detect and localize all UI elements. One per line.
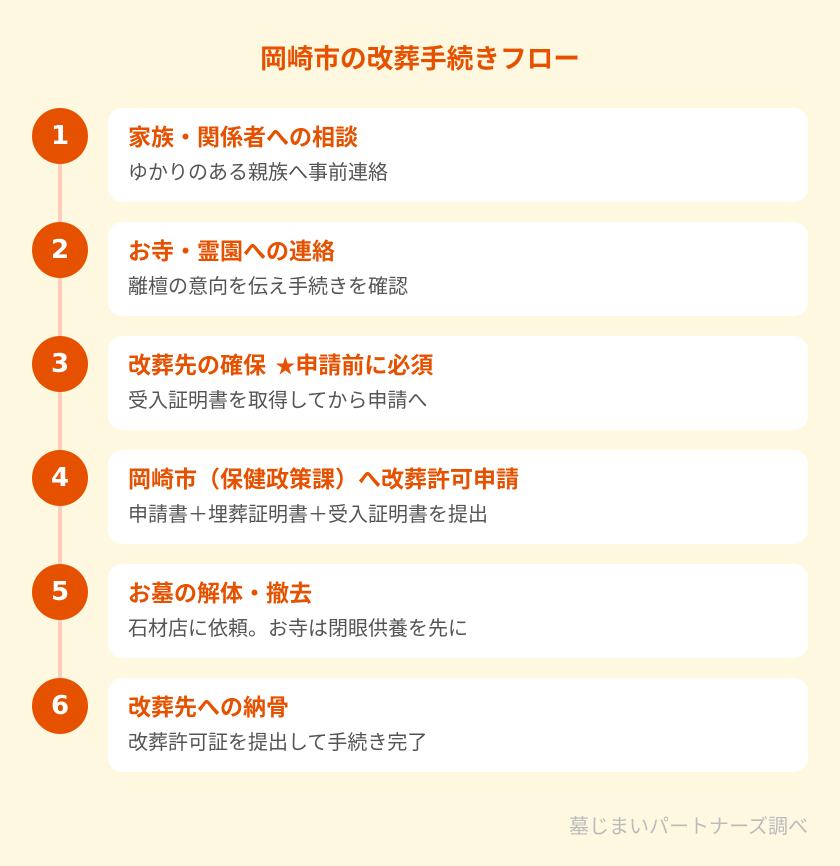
panel: step 5 bbox=[108, 564, 808, 658]
step 5 description: 石材店に依頼。お寺は閉眼供養を先に bbox=[128, 618, 468, 640]
step 5 heading: お墓の解体・撤去 bbox=[128, 580, 312, 606]
panel: step 2 bbox=[108, 222, 808, 316]
step 5 number bbox=[32, 564, 88, 620]
step 2 description: 離檀の意向を伝え手続きを確認 bbox=[128, 276, 408, 298]
step 2 heading: お寺・霊園への連絡 bbox=[128, 238, 335, 264]
step 6 number: 6 bbox=[51, 691, 69, 721]
step 2 number bbox=[32, 222, 88, 278]
step 3 number bbox=[32, 336, 88, 392]
step 4 heading: 岡崎市（保健政策課）へ改葬許可申請 bbox=[128, 466, 519, 492]
panel: step 6 bbox=[108, 678, 808, 772]
panel: step 4 bbox=[108, 450, 808, 544]
step 4 number: 4 bbox=[51, 463, 69, 493]
panel: step 3 bbox=[108, 336, 808, 430]
source note: 墓じまいパートナーズ調べ bbox=[569, 816, 808, 838]
step 3 description: 受入証明書を取得してから申請へ bbox=[128, 390, 427, 412]
step 4 description: 申請書＋埋葬証明書＋受入証明書を提出 bbox=[128, 504, 488, 526]
step 1 description: ゆかりのある親族へ事前連絡 bbox=[128, 162, 388, 184]
connector line: step 1 to 6 bbox=[58, 136, 62, 706]
step 6 description: 改葬許可証を提出して手続き完了 bbox=[128, 732, 427, 754]
step 4 number bbox=[32, 450, 88, 506]
panel: step 1 bbox=[108, 108, 808, 202]
step 2 number: 2 bbox=[51, 235, 69, 265]
step 1 number bbox=[32, 108, 88, 164]
step 1 heading: 家族・関係者への相談 bbox=[128, 124, 358, 150]
step 1 number: 1 bbox=[51, 121, 69, 151]
step 3 heading: 改葬先の確保 ★申請前に必須 bbox=[128, 352, 433, 378]
step 6 number bbox=[32, 678, 88, 734]
title: 岡崎市の改葬手続きフロー bbox=[260, 44, 580, 74]
step 6 heading: 改葬先への納骨 bbox=[128, 694, 289, 720]
step 5 number: 5 bbox=[51, 577, 69, 607]
step 3 number: 3 bbox=[51, 349, 69, 379]
